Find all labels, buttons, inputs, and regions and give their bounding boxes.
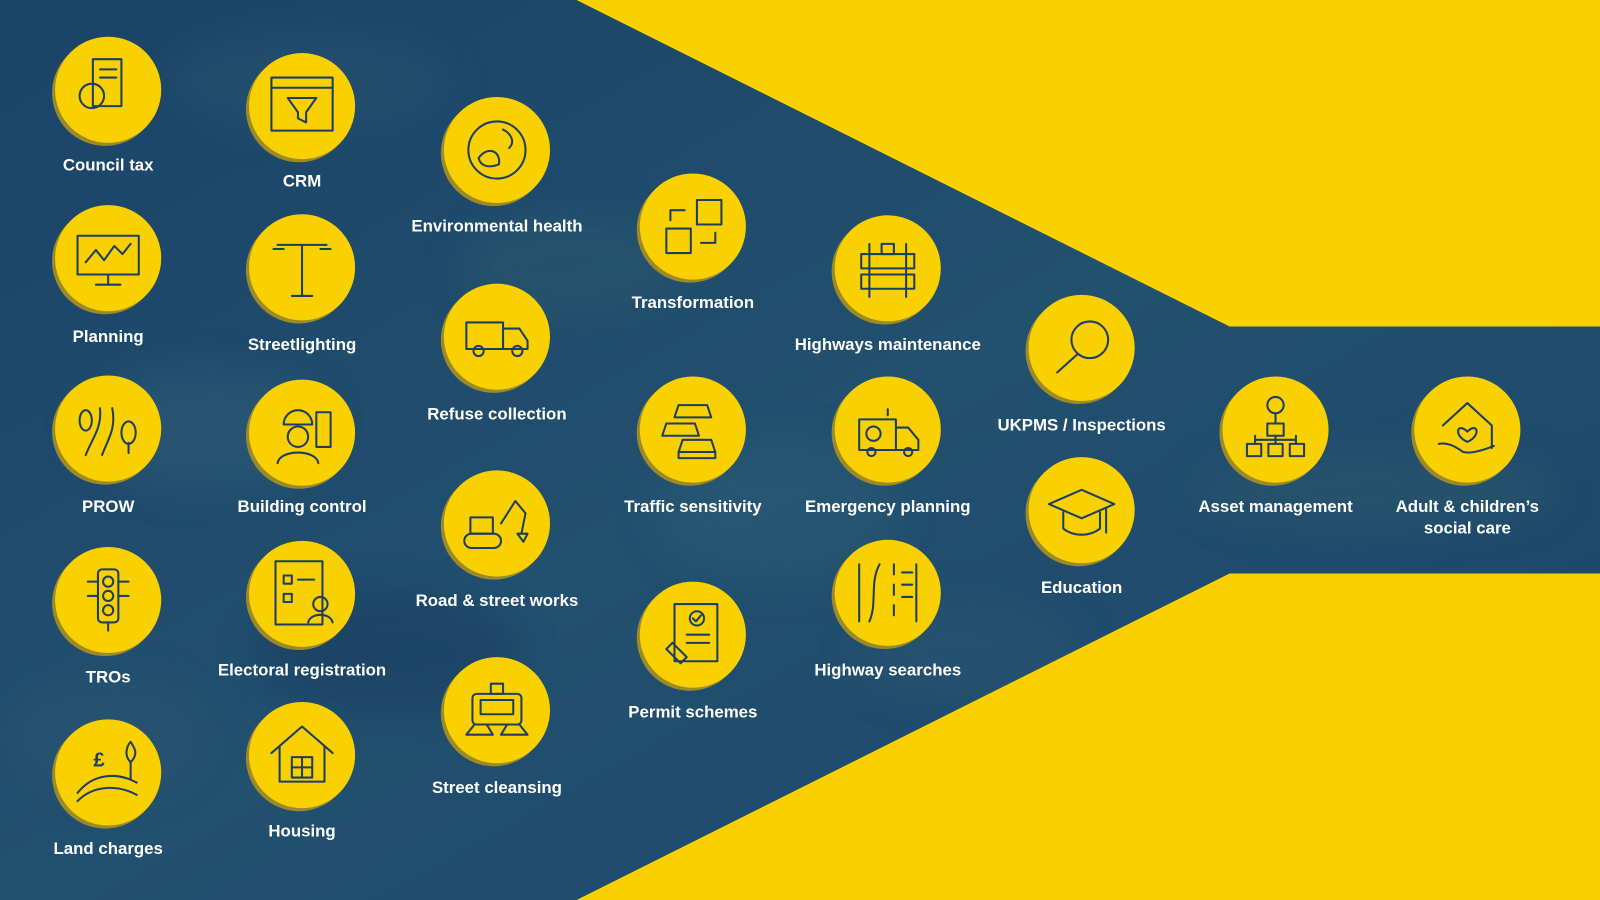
item: Streetlighting: Streetlighting: [248, 335, 356, 354]
item: UKPMS / Inspections: [997, 295, 1166, 435]
item: Council tax: Council tax: [63, 155, 154, 174]
item: Land charges: [52, 719, 163, 858]
item: UKPMS / Inspections: UKPMS / Inspections: [997, 416, 1166, 435]
item: Permit schemes: [628, 582, 757, 721]
item: Council tax: [52, 37, 161, 174]
item: Asset management: [1198, 377, 1353, 516]
item: Transformation: [632, 173, 754, 312]
item: Refuse collection: [427, 284, 567, 423]
item: Permit schemes: Permit schemes: [628, 702, 757, 721]
item: Refuse collection: Refuse collection: [427, 404, 567, 423]
item: Adult & children's social care: [1396, 377, 1539, 538]
item: Housing: [246, 702, 355, 841]
item: Asset management: Asset management: [1198, 497, 1353, 516]
item: Streetlighting: [246, 214, 356, 354]
item: Environmental health: [411, 97, 583, 236]
item: Road & street works: Road & street works: [416, 591, 578, 610]
item: Adult & children's social care: social care: [1424, 519, 1511, 538]
item: Electoral registration: [218, 541, 386, 680]
yellow funnel shape bottom: [577, 573, 1600, 900]
item: Highway searches: Highway searches: [814, 661, 961, 680]
item: Emergency planning: Emergency planning: [805, 497, 971, 516]
item: Land charges: £: [93, 749, 105, 771]
item: Building control: Building control: [238, 497, 367, 516]
item: Planning: Planning: [73, 327, 144, 346]
yellow funnel shape top: [577, 0, 1600, 327]
item: PROW: PROW: [82, 497, 134, 516]
item: Transformation: Transformation: [632, 293, 754, 312]
item: Emergency planning: [805, 377, 971, 516]
item: Highway searches: [814, 540, 961, 680]
item: Environmental health: Environmental health: [411, 217, 583, 236]
item: Highways maintenance: Highways maintenance: [795, 335, 981, 354]
item: Street cleansing: Street cleansing: [432, 778, 562, 797]
item: Education: [1026, 457, 1135, 597]
item: Planning: [52, 205, 161, 346]
item: Adult & children's social care: Adult & children’s: [1396, 497, 1539, 516]
item: Highways maintenance: [795, 215, 981, 354]
item: Building control: [238, 380, 367, 516]
item: Road & street works: [416, 470, 578, 610]
item: CRM: CRM: [283, 172, 321, 191]
item: Traffic sensitivity: Traffic sensitivity: [624, 497, 762, 516]
item: Land charges: Land charges: [53, 839, 163, 858]
item: Housing: Housing: [268, 822, 336, 841]
item: Traffic sensitivity: [624, 377, 762, 516]
item: Education: Education: [1041, 578, 1122, 597]
item: PROW: [52, 376, 161, 516]
item: CRM: [246, 53, 355, 191]
item: TROs: TROs: [86, 668, 131, 687]
item: TROs: [52, 547, 161, 687]
item: Street cleansing: [432, 657, 562, 797]
item: Electoral registration: Electoral registration: [218, 661, 386, 680]
